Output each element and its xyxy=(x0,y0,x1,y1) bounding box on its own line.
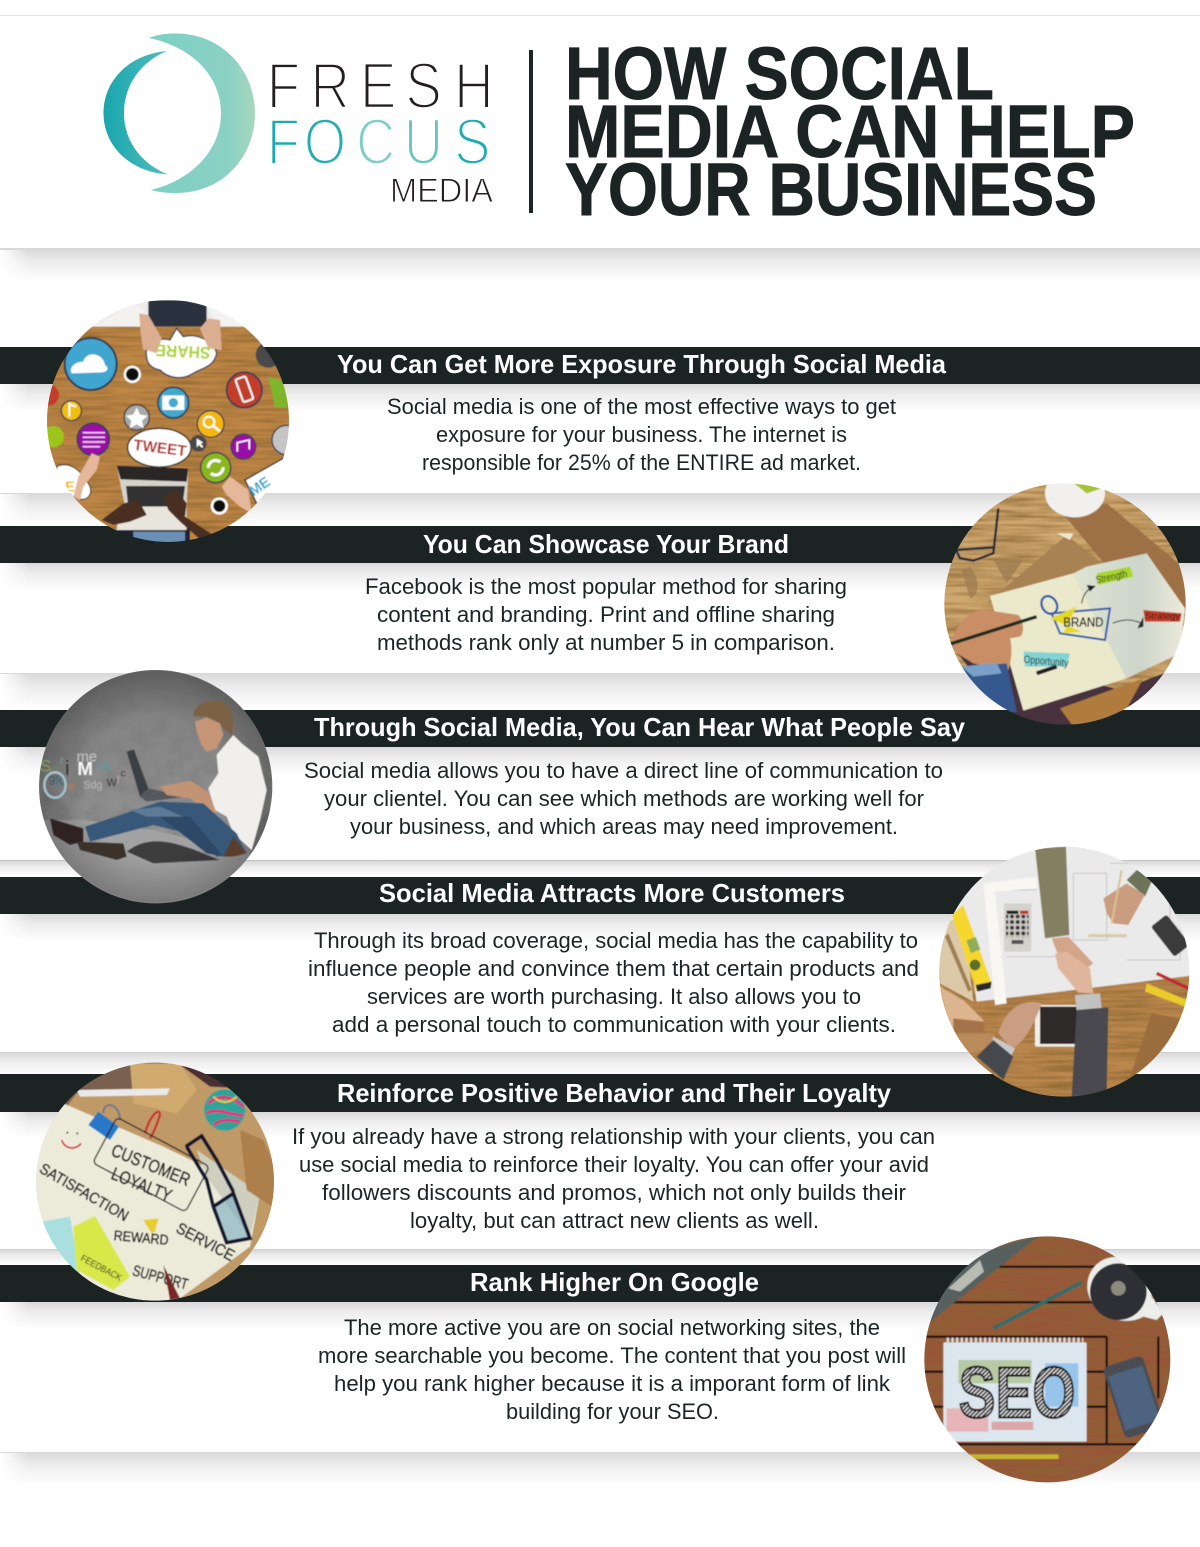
body: Facebook is the most popular method for sharing xyxy=(365,574,847,599)
wordmark: FRESH: FRESH xyxy=(267,50,494,122)
icon: teal crescent xyxy=(104,51,168,174)
floating letters: S xyxy=(40,757,51,776)
title: HOW SOCIAL xyxy=(565,32,994,115)
calculator xyxy=(1004,903,1031,952)
header band xyxy=(0,15,1200,282)
floating letters: D xyxy=(56,774,66,790)
wordmark: FOCUS: U xyxy=(404,106,443,178)
floating letters: i xyxy=(65,758,69,780)
body: your clientel. You can see which methods are working well for xyxy=(324,786,924,811)
photo: handshake over blueprint xyxy=(937,845,1197,1102)
wordmark: FOCUS: C xyxy=(356,106,395,178)
handwritten words: REWARD xyxy=(113,1227,169,1248)
body xyxy=(292,1124,935,1233)
handwritten words: SATISFACTION xyxy=(36,1160,131,1225)
floating letters: M xyxy=(77,758,93,779)
body: loyalty, but can attract new clients as well. xyxy=(410,1208,819,1233)
floating letters: ym xyxy=(48,764,61,774)
body xyxy=(387,394,896,475)
floating letters: T8 xyxy=(95,761,110,775)
section 2 text xyxy=(365,529,847,655)
floating letters: Sdg xyxy=(83,779,102,791)
heading: You Can Showcase Your Brand xyxy=(423,529,789,559)
body xyxy=(365,574,847,655)
tweet bubble text: TWEET xyxy=(132,437,188,460)
photo: social media icons on a table: ME xyxy=(246,474,274,500)
photo: man with laptop xyxy=(37,668,277,908)
wordmark: MEDIA: MEDIA xyxy=(390,172,493,210)
photo: SEO notebook on wooden table xyxy=(923,1235,1177,1485)
ball of yarn xyxy=(204,1089,245,1131)
floating letters: W xyxy=(107,777,118,789)
heading: Rank Higher On Google xyxy=(470,1267,759,1297)
heading: You Can Get More Exposure Through Social Media xyxy=(337,349,947,379)
photo: brand notebook on desk: Strength xyxy=(1095,569,1128,586)
heading: Reinforce Positive Behavior and Their Loyalty xyxy=(337,1078,892,1108)
photo: brand notebook on desk xyxy=(944,484,1186,725)
body: Social media is one of the most effective ways to get xyxy=(387,394,896,419)
hand with pen xyxy=(950,610,1037,670)
photo: social media icons on a table: E xyxy=(65,480,75,496)
photo: customer loyalty notes xyxy=(33,1060,277,1303)
body: responsible for 25% of the ENTIRE ad market. xyxy=(422,450,861,475)
wordmark: FOCUS: F xyxy=(267,106,300,178)
handwritten words: SUPPORT xyxy=(131,1262,190,1294)
body: services are worth purchasing. It also allows you to xyxy=(367,984,861,1009)
photo: brand notebook on desk: Strategy xyxy=(1145,611,1181,621)
spirit level xyxy=(952,905,992,992)
body xyxy=(308,928,919,1037)
body: more searchable you become. The content that you post will xyxy=(318,1343,906,1368)
glasses xyxy=(186,1136,250,1243)
body: If you already have a strong relationship with your clients, you can xyxy=(292,1124,935,1149)
body: Social media allows you to have a direct line of communication to xyxy=(304,758,943,783)
title: MEDIA CAN HELP xyxy=(565,90,1135,173)
divider xyxy=(529,50,533,213)
photo: brand notebook on desk: Opportunity xyxy=(1023,654,1069,670)
body: followers discounts and promos, which not only builds their xyxy=(322,1180,906,1205)
floating letters: f xyxy=(117,774,120,786)
laptop xyxy=(117,466,188,530)
body: content and branding. Print and offline sharing xyxy=(377,602,835,627)
body xyxy=(304,758,943,839)
floating letters xyxy=(40,750,126,798)
handwritten words xyxy=(36,1140,237,1294)
floating letters: c xyxy=(121,769,126,780)
body: add a personal touch to communication with your clients. xyxy=(332,1012,896,1037)
title: YOUR BUSINESS xyxy=(565,148,1097,231)
wordmark: FOCUS: S xyxy=(454,106,491,178)
body: methods rank only at number 5 in comparison. xyxy=(377,630,835,655)
photo: SEO notebook on wooden table: SEO xyxy=(959,1354,1075,1434)
icon: light crescent xyxy=(149,34,255,193)
body: use social media to reinforce their loyalty. You can offer your avid xyxy=(299,1152,929,1177)
floating letters: e xyxy=(68,779,75,793)
photo: social media icons on a table xyxy=(47,300,289,542)
floating letters: r xyxy=(60,755,64,767)
coffee cup xyxy=(1087,1257,1163,1321)
handwritten words: LOYALTY xyxy=(109,1163,175,1206)
floating letters: 9K xyxy=(48,774,64,788)
man xyxy=(50,701,267,860)
handwritten words: SERVICE xyxy=(173,1220,237,1265)
section 3 text xyxy=(304,712,966,839)
wordmark: FOCUS xyxy=(267,106,491,178)
body: Through its broad coverage, social media has the capability to xyxy=(314,928,918,953)
section 5 text xyxy=(292,1078,935,1233)
phone xyxy=(1103,1356,1160,1438)
panel shadows xyxy=(0,384,1200,1485)
handshake xyxy=(1052,937,1093,993)
share bubble text: SHARE xyxy=(155,340,211,362)
heading: Social Media Attracts More Customers xyxy=(379,878,845,908)
body: your business, and which areas may need improvement. xyxy=(350,814,898,839)
wordmark: FOCUS: O xyxy=(304,106,346,178)
photo: customer loyalty notes: FEEDBACK xyxy=(79,1253,124,1283)
notebook xyxy=(990,553,1185,711)
glasses xyxy=(956,508,998,561)
photo: brand notebook on desk: BRAND xyxy=(1063,615,1103,630)
icon: cloud xyxy=(65,338,117,390)
body: help you rank higher because it is a imporant form of link xyxy=(334,1371,891,1396)
body: The more active you are on social networking sites, the xyxy=(344,1315,880,1340)
floating letters: me xyxy=(77,750,97,766)
body xyxy=(318,1315,906,1424)
body: building for your SEO. xyxy=(506,1399,719,1424)
section 1 text xyxy=(337,349,947,475)
section 6 text xyxy=(318,1267,906,1424)
section 4 text xyxy=(308,878,919,1037)
notebook xyxy=(943,1340,1087,1442)
logo: Fresh Focus Media xyxy=(104,34,494,210)
heading bars xyxy=(0,347,1200,1302)
handwritten words: CUSTOMER xyxy=(109,1140,193,1190)
body: exposure for your business. The internet is xyxy=(436,422,847,447)
title xyxy=(565,32,1135,231)
heading: Through Social Media, You Can Hear What People Say xyxy=(314,712,966,742)
body: influence people and convince them that certain products and xyxy=(308,956,919,981)
